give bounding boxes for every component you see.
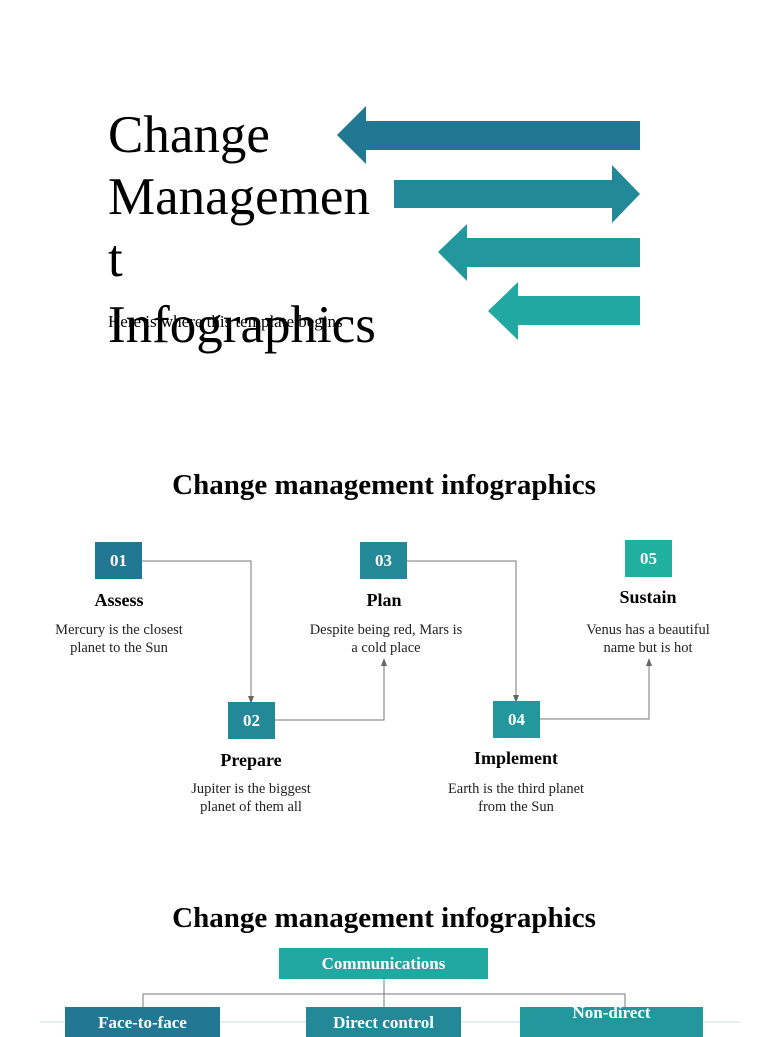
arrows graphic: [337, 106, 640, 340]
step 02 desc: Jupiter is the biggest planet of them all: [191, 781, 311, 815]
step 04: 04: [508, 710, 525, 728]
heading: process: Change management infographics: [172, 469, 596, 501]
step 05 label: Sustain: [619, 587, 677, 607]
heading: communications: Change management infographics: [172, 902, 596, 934]
direct control box: [306, 1007, 461, 1037]
arrow 4 left: [488, 282, 640, 340]
arrow 1 left: [337, 106, 640, 164]
arrow 3 left: [438, 224, 640, 281]
step 03: 03: [375, 550, 392, 570]
arrow 2 right: [394, 165, 640, 223]
step 02 label: Prepare: [220, 750, 282, 770]
title: Infographics: [108, 296, 376, 354]
step 03 label: Plan: [366, 590, 402, 610]
communications box: [279, 948, 488, 979]
step 05: [625, 540, 672, 577]
step 03: [360, 542, 407, 579]
title: [108, 106, 376, 354]
face-to-face box: [65, 1007, 220, 1037]
step 01 desc: Mercury is the closest planet to the Sun: [55, 622, 183, 656]
subtitle: Here is where this template begins: [108, 312, 343, 331]
step 01: [95, 542, 142, 579]
step 02: 02: [243, 710, 260, 730]
communications box: Communications: [322, 954, 445, 972]
title: t: [108, 230, 123, 288]
non-direct box: [520, 1007, 703, 1037]
step 03 desc: Despite being red, Mars is a cold place: [310, 622, 462, 656]
step 05 desc: Venus has a beautiful name but is hot: [586, 622, 710, 656]
step 01: 01: [110, 550, 127, 570]
step 01 label: Assess: [94, 590, 144, 610]
step 04 label: Implement: [474, 748, 558, 768]
direct control box: Direct control: [333, 1013, 434, 1032]
step 04: [493, 701, 540, 738]
step 04 desc: Earth is the third planet from the Sun: [448, 781, 584, 815]
face-to-face box: Face-to-face: [98, 1013, 187, 1032]
title: Managemen: [108, 168, 370, 226]
step 02: [228, 702, 275, 739]
step 05: 05: [640, 548, 657, 568]
non-direct box: Non-direct: [572, 1003, 651, 1022]
title: Change: [108, 106, 270, 164]
